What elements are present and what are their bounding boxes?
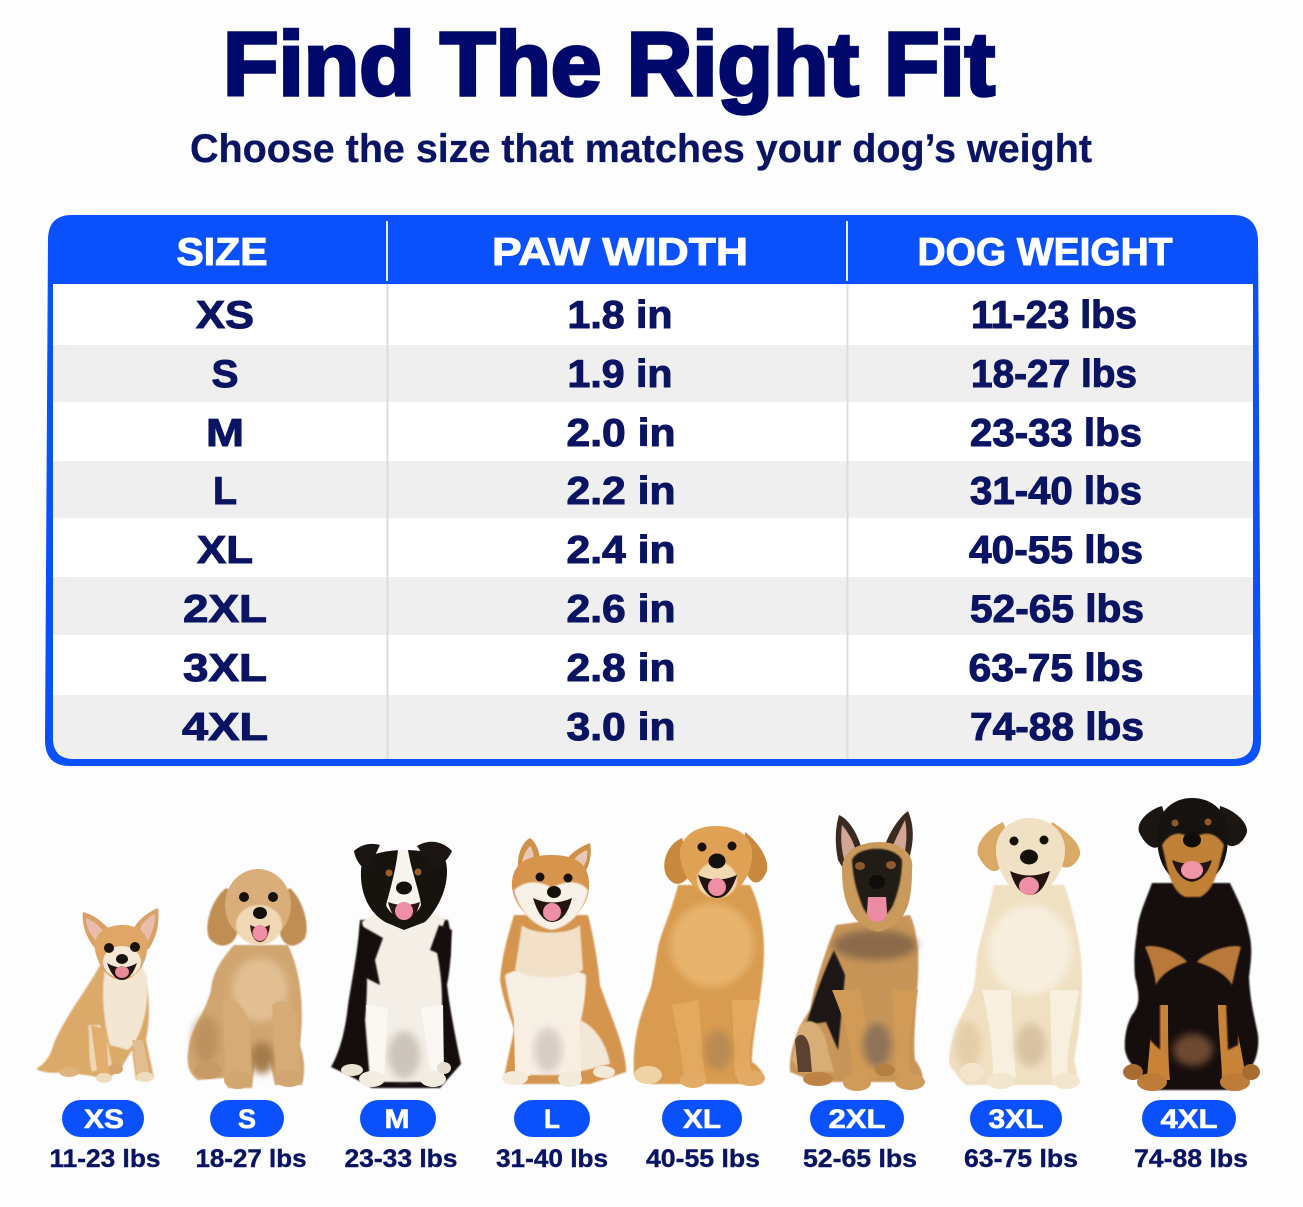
badge 3XL label: 3XL: [988, 1104, 1044, 1134]
table row M: [206, 412, 1142, 455]
weight L: 31-40 lbs: [496, 1145, 608, 1173]
dog L: shiba inu: [500, 838, 626, 1087]
table row S: [212, 353, 1137, 396]
table header row: SIZE: [176, 231, 268, 274]
table row 2XL: 52-65 lbs: [970, 588, 1144, 631]
weight XL: 40-55 lbs: [646, 1145, 760, 1173]
weight 2XL: 52-65 lbs: [803, 1145, 917, 1173]
size badges and weights: [50, 1100, 1248, 1173]
table row L: L: [213, 470, 237, 513]
table header row: [176, 231, 1173, 274]
table row 4XL: 3.0 in: [566, 706, 676, 749]
table row XL: 40-55 lbs: [969, 529, 1143, 572]
table row S: 1.9 in: [568, 353, 672, 396]
table row 4XL: 4XL: [182, 706, 268, 749]
badge 2XL: [810, 1100, 904, 1137]
badge 2XL label: 2XL: [828, 1104, 886, 1134]
table row L: 2.2 in: [566, 470, 676, 513]
table row 4XL: [182, 706, 1144, 749]
dog XS: chihuahua: [36, 908, 159, 1083]
badge M label: M: [384, 1104, 410, 1134]
table row XS: 11-23 lbs: [971, 294, 1137, 337]
table row 3XL: 3XL: [183, 647, 267, 690]
weight M: 23-33 lbs: [344, 1145, 458, 1173]
table row M: M: [206, 412, 244, 455]
title: Find The Right Fit: [223, 15, 995, 115]
weight S: 18-27 lbs: [196, 1145, 306, 1173]
table row XS: XS: [196, 294, 254, 337]
table row L: 31-40 lbs: [970, 470, 1142, 513]
weight 4XL: 74-88 lbs: [1134, 1145, 1248, 1173]
table row M: 2.0 in: [566, 412, 676, 455]
table row 4XL: 74-88 lbs: [970, 706, 1144, 749]
badge L: [514, 1100, 590, 1137]
dog M: border collie: [331, 842, 461, 1088]
weight 3XL: 63-75 lbs: [964, 1145, 1078, 1173]
weight XS: 11-23 lbs: [50, 1145, 160, 1173]
table header row: DOG WEIGHT: [918, 231, 1173, 274]
table row 2XL: [183, 588, 1144, 631]
dog 2XL: german shepherd: [790, 811, 925, 1091]
badge 3XL: [970, 1100, 1062, 1137]
table row 2XL: 2XL: [183, 588, 267, 631]
subtitle: Choose the size that matches your dog’s weight: [190, 127, 1092, 171]
badge L label: L: [544, 1104, 560, 1134]
badge 4XL label: 4XL: [1160, 1104, 1218, 1134]
badge 4XL: [1142, 1100, 1236, 1137]
table body: [53, 221, 1253, 759]
table row XL: [197, 529, 1143, 572]
size chart table: [45, 215, 1261, 766]
table row XL: XL: [197, 529, 253, 572]
badge XL label: XL: [683, 1104, 721, 1134]
table row 3XL: [183, 647, 1144, 690]
table row XL: 2.4 in: [566, 529, 676, 572]
badge S: [210, 1100, 284, 1137]
table row XS: 1.8 in: [568, 294, 672, 337]
table row S: 18-27 lbs: [971, 353, 1137, 396]
table row L: [213, 470, 1142, 513]
badge M: [360, 1100, 436, 1137]
table row 2XL: 2.6 in: [566, 588, 676, 631]
badge XS: [62, 1100, 144, 1137]
dog 4XL: rottweiler: [1123, 798, 1260, 1091]
table row 3XL: 2.8 in: [566, 647, 676, 690]
table row M: 23-33 lbs: [970, 412, 1142, 455]
badge S label: S: [238, 1104, 256, 1134]
table frame: [45, 215, 1261, 766]
dog S: doodle: [188, 869, 307, 1089]
table row XS: [196, 294, 1137, 337]
dog XL: golden retriever: [634, 826, 767, 1088]
table header row: PAW WIDTH: [492, 231, 748, 274]
table row 3XL: 63-75 lbs: [968, 647, 1144, 690]
dog 3XL: labrador: [949, 818, 1082, 1089]
badge XL: [662, 1100, 742, 1137]
table row S: S: [212, 353, 238, 396]
badge XS label: XS: [84, 1104, 124, 1134]
